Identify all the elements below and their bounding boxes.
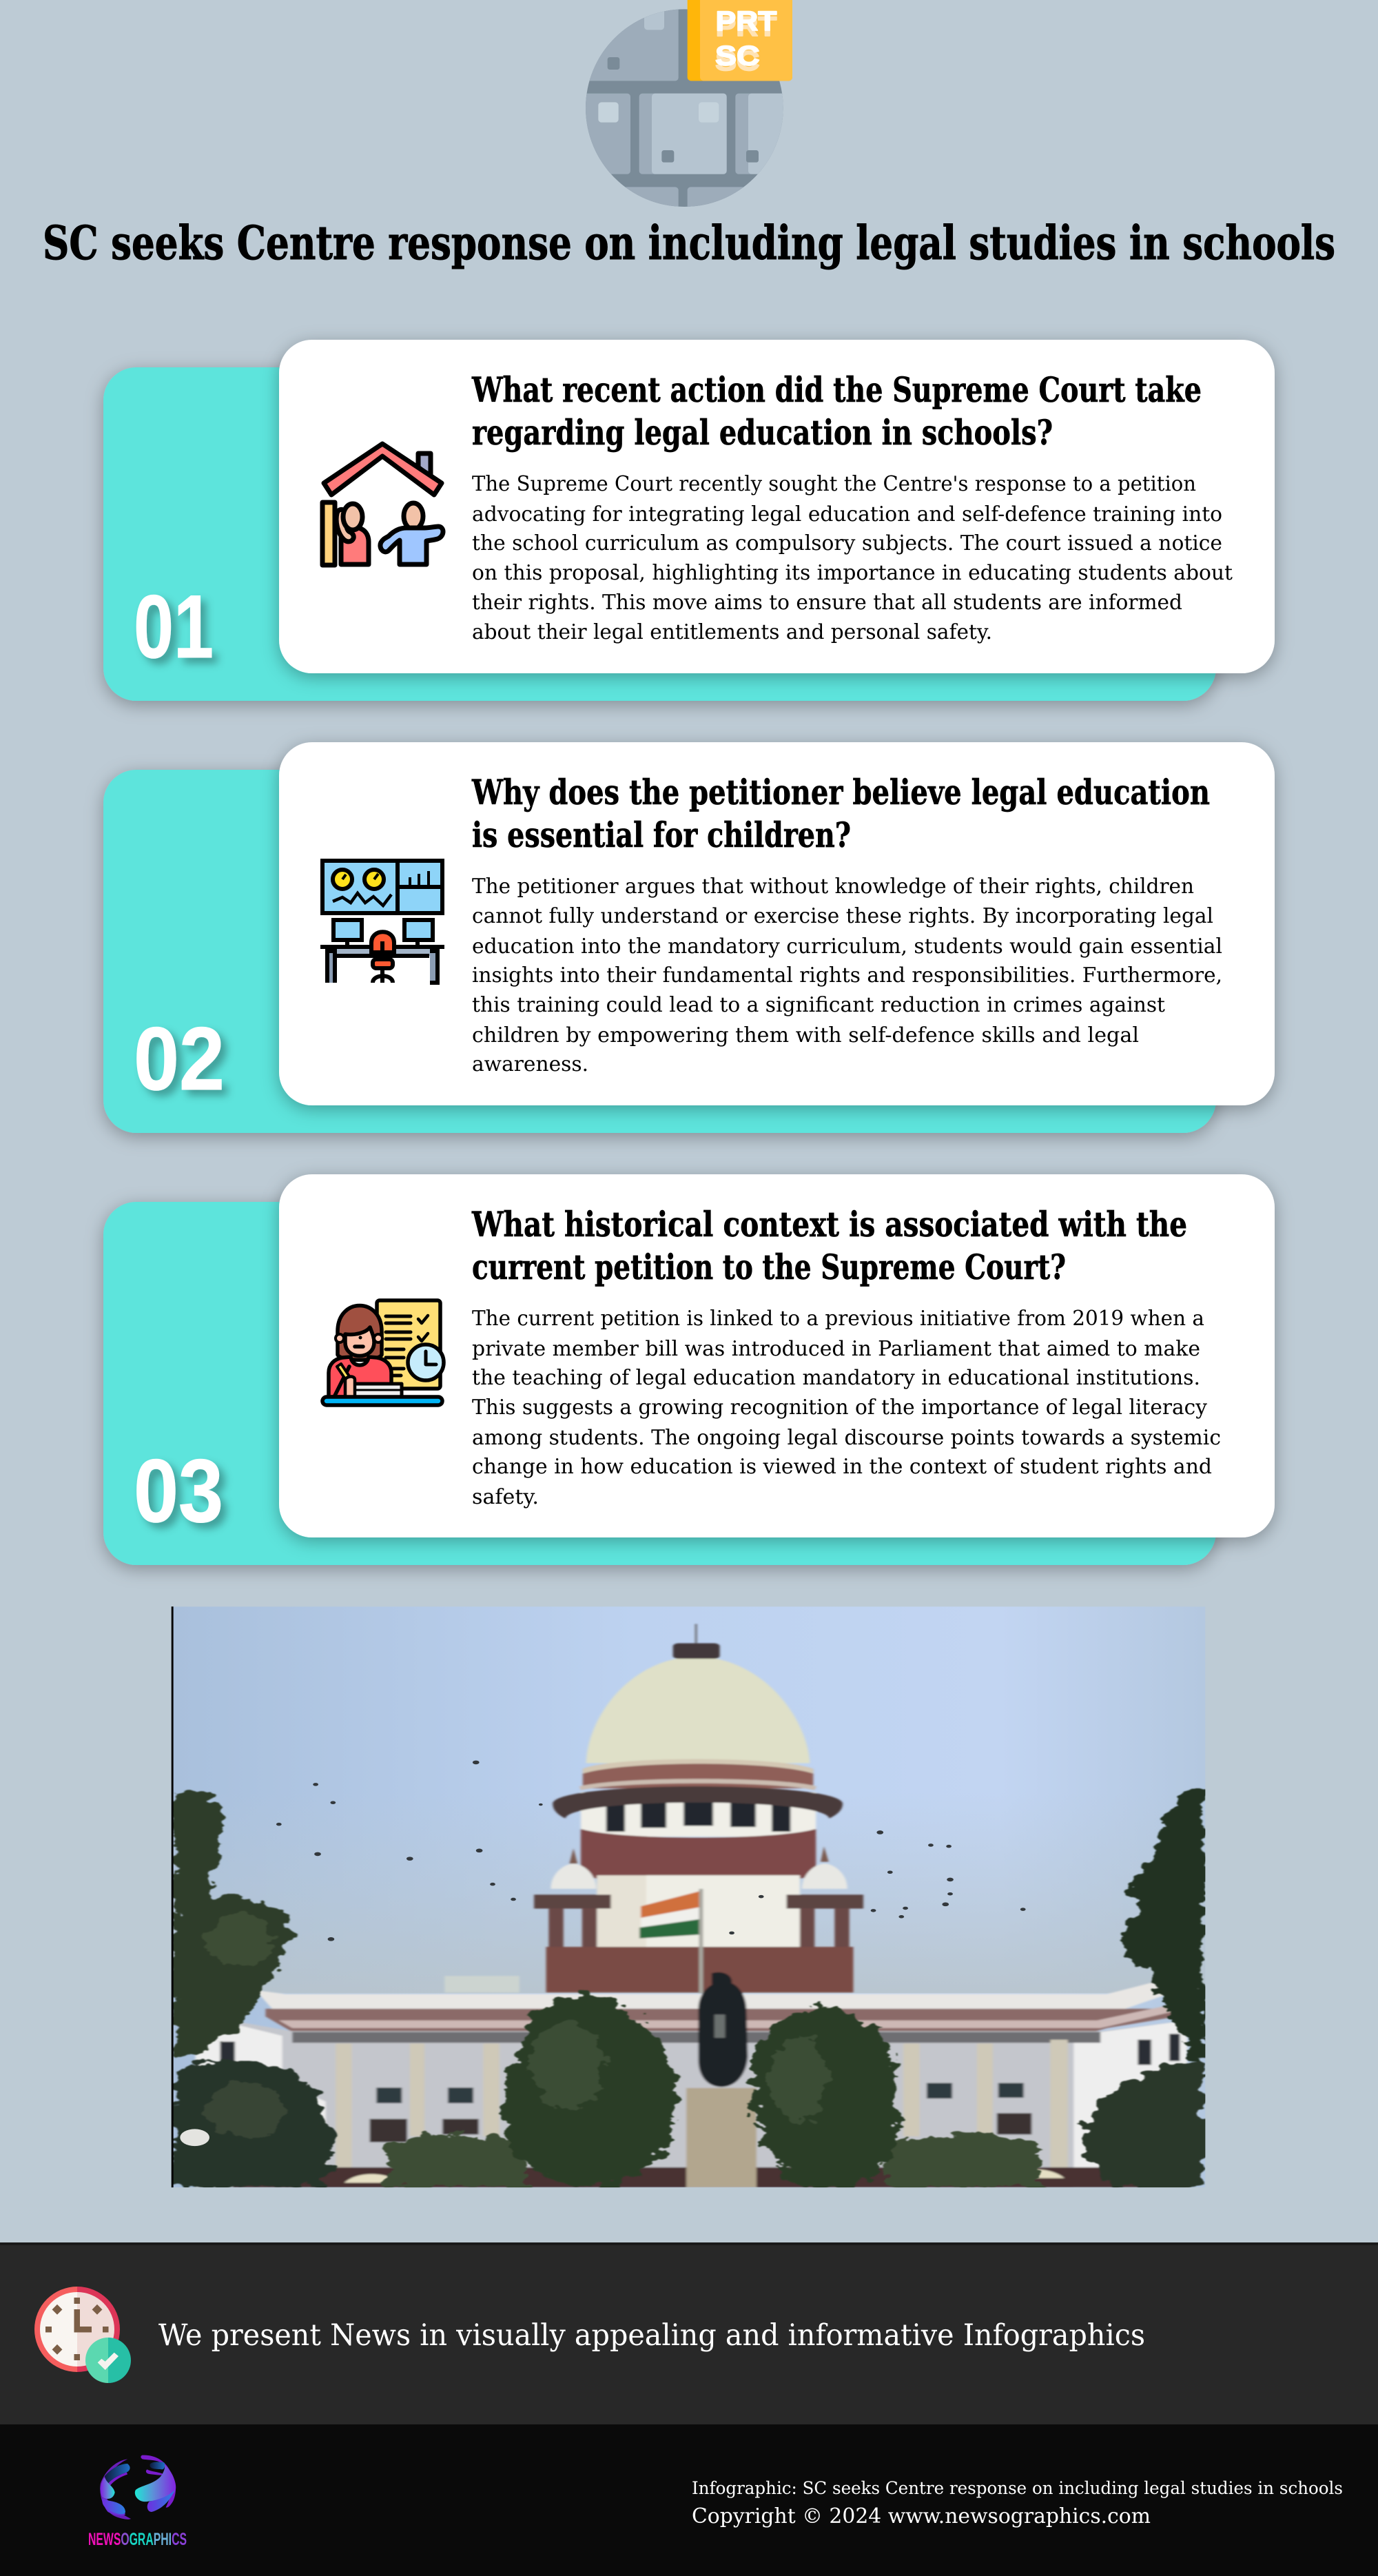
question 2 body: awareness.	[472, 1052, 588, 1076]
footer credit text: Infographic: SC seeks Centre response on including legal studies in schools	[692, 2478, 1343, 2498]
footer credit text: Copyright © 2024 www.newsographics.com	[692, 2504, 1151, 2528]
question 1 body: about their legal entitlements and personal safety.	[472, 620, 992, 644]
question 1 heading	[471, 369, 1202, 453]
question 2 body: this training could lead to a significant reduction in crimes against	[472, 993, 1165, 1017]
question 3 body: private member bill was introduced in Parliament that aimed to make	[472, 1337, 1200, 1361]
question 1 body: The Supreme Court recently sought the Centre's response to a petition	[472, 472, 1196, 496]
question 3 body: change in how education is viewed in the context of student rights and	[472, 1455, 1212, 1479]
white card 1	[279, 340, 1275, 673]
logo: Newsographics: NEWSOGRAPHICS	[88, 2530, 187, 2549]
icon: print screen key: PRT	[716, 12, 777, 42]
teal backing 1	[103, 367, 1216, 701]
question 3 body: among students. The ongoing legal discourse points towards a systemic	[472, 1426, 1221, 1450]
photo: Supreme Court of India building	[172, 1606, 1205, 2187]
question 3 body: the teaching of legal education mandatory in educational institutions.	[472, 1366, 1200, 1390]
question 3 body: safety.	[472, 1485, 539, 1509]
white card 3	[279, 1174, 1275, 1537]
panel: question 3	[103, 1174, 1275, 1565]
logo: Newsographics	[88, 2455, 187, 2549]
question 3 heading: What historical context is associated with the	[471, 1204, 1187, 1245]
question 3 body: The current petition is linked to a previous initiative from 2019 when a	[472, 1307, 1204, 1331]
question 1 body: their rights. This move aims to ensure that all students are informed	[472, 591, 1182, 615]
question 1 body: the school curriculum as compulsory subjects. The court issued a notice	[472, 531, 1222, 555]
question 3 body	[472, 1307, 1221, 1509]
icon: print screen key: PRT	[716, 6, 777, 37]
teal backing 3	[103, 1202, 1216, 1565]
banner: tagline strip	[0, 2242, 1378, 2424]
icon: family at home	[322, 444, 443, 565]
question 2 body: cannot fully understand or exercise these rights. By incorporating legal	[472, 904, 1213, 928]
question 2 heading	[471, 772, 1210, 855]
question 2 body: education into the mandatory curriculum, students would gain essential	[472, 934, 1222, 959]
number 02: 02	[134, 1008, 225, 1109]
question 2 body: insights into their fundamental rights and responsibilities. Furthermore,	[472, 963, 1222, 988]
footer credit text	[692, 2478, 1343, 2528]
white card 2	[279, 742, 1275, 1105]
question 3 heading: current petition to the Supreme Court?	[472, 1247, 1066, 1287]
panel: question 2	[103, 742, 1275, 1133]
icon: student with checklist	[322, 1300, 444, 1405]
question 1 heading: What recent action did the Supreme Court take	[471, 369, 1202, 410]
question 2 body	[472, 875, 1222, 1076]
footer bar	[0, 2424, 1378, 2576]
number 03: 03	[134, 1440, 223, 1541]
icon: print screen key: SC	[715, 46, 760, 76]
tagline text: We present News in visually appealing and informative Infographics	[158, 2318, 1145, 2353]
question 2 body: The petitioner argues that without knowledge of their rights, children	[472, 875, 1194, 899]
question 1 heading: regarding legal education in schools?	[472, 412, 1053, 453]
number 01: 01	[134, 576, 214, 677]
teal backing 2	[103, 770, 1216, 1133]
question 1 body: on this proposal, highlighting its importance in educating students about	[472, 561, 1233, 585]
question 3 body: This suggests a growing recognition of the importance of legal literacy	[472, 1396, 1207, 1420]
icon: control room desk	[320, 861, 444, 983]
question 2 body: children by empowering them with self-defence skills and legal	[472, 1023, 1139, 1047]
icon: print screen key	[586, 0, 792, 207]
question 1 body: advocating for integrating legal education and self-defence training into	[472, 502, 1222, 527]
icon: print screen key: SC	[715, 41, 760, 72]
panel: question 1	[103, 340, 1275, 701]
icon: clock with check badge	[34, 2287, 131, 2383]
question 3 heading	[471, 1204, 1187, 1287]
question 2 heading: is essential for children?	[472, 815, 851, 855]
question 1 body	[472, 472, 1233, 644]
question 2 heading: Why does the petitioner believe legal education	[471, 772, 1210, 812]
